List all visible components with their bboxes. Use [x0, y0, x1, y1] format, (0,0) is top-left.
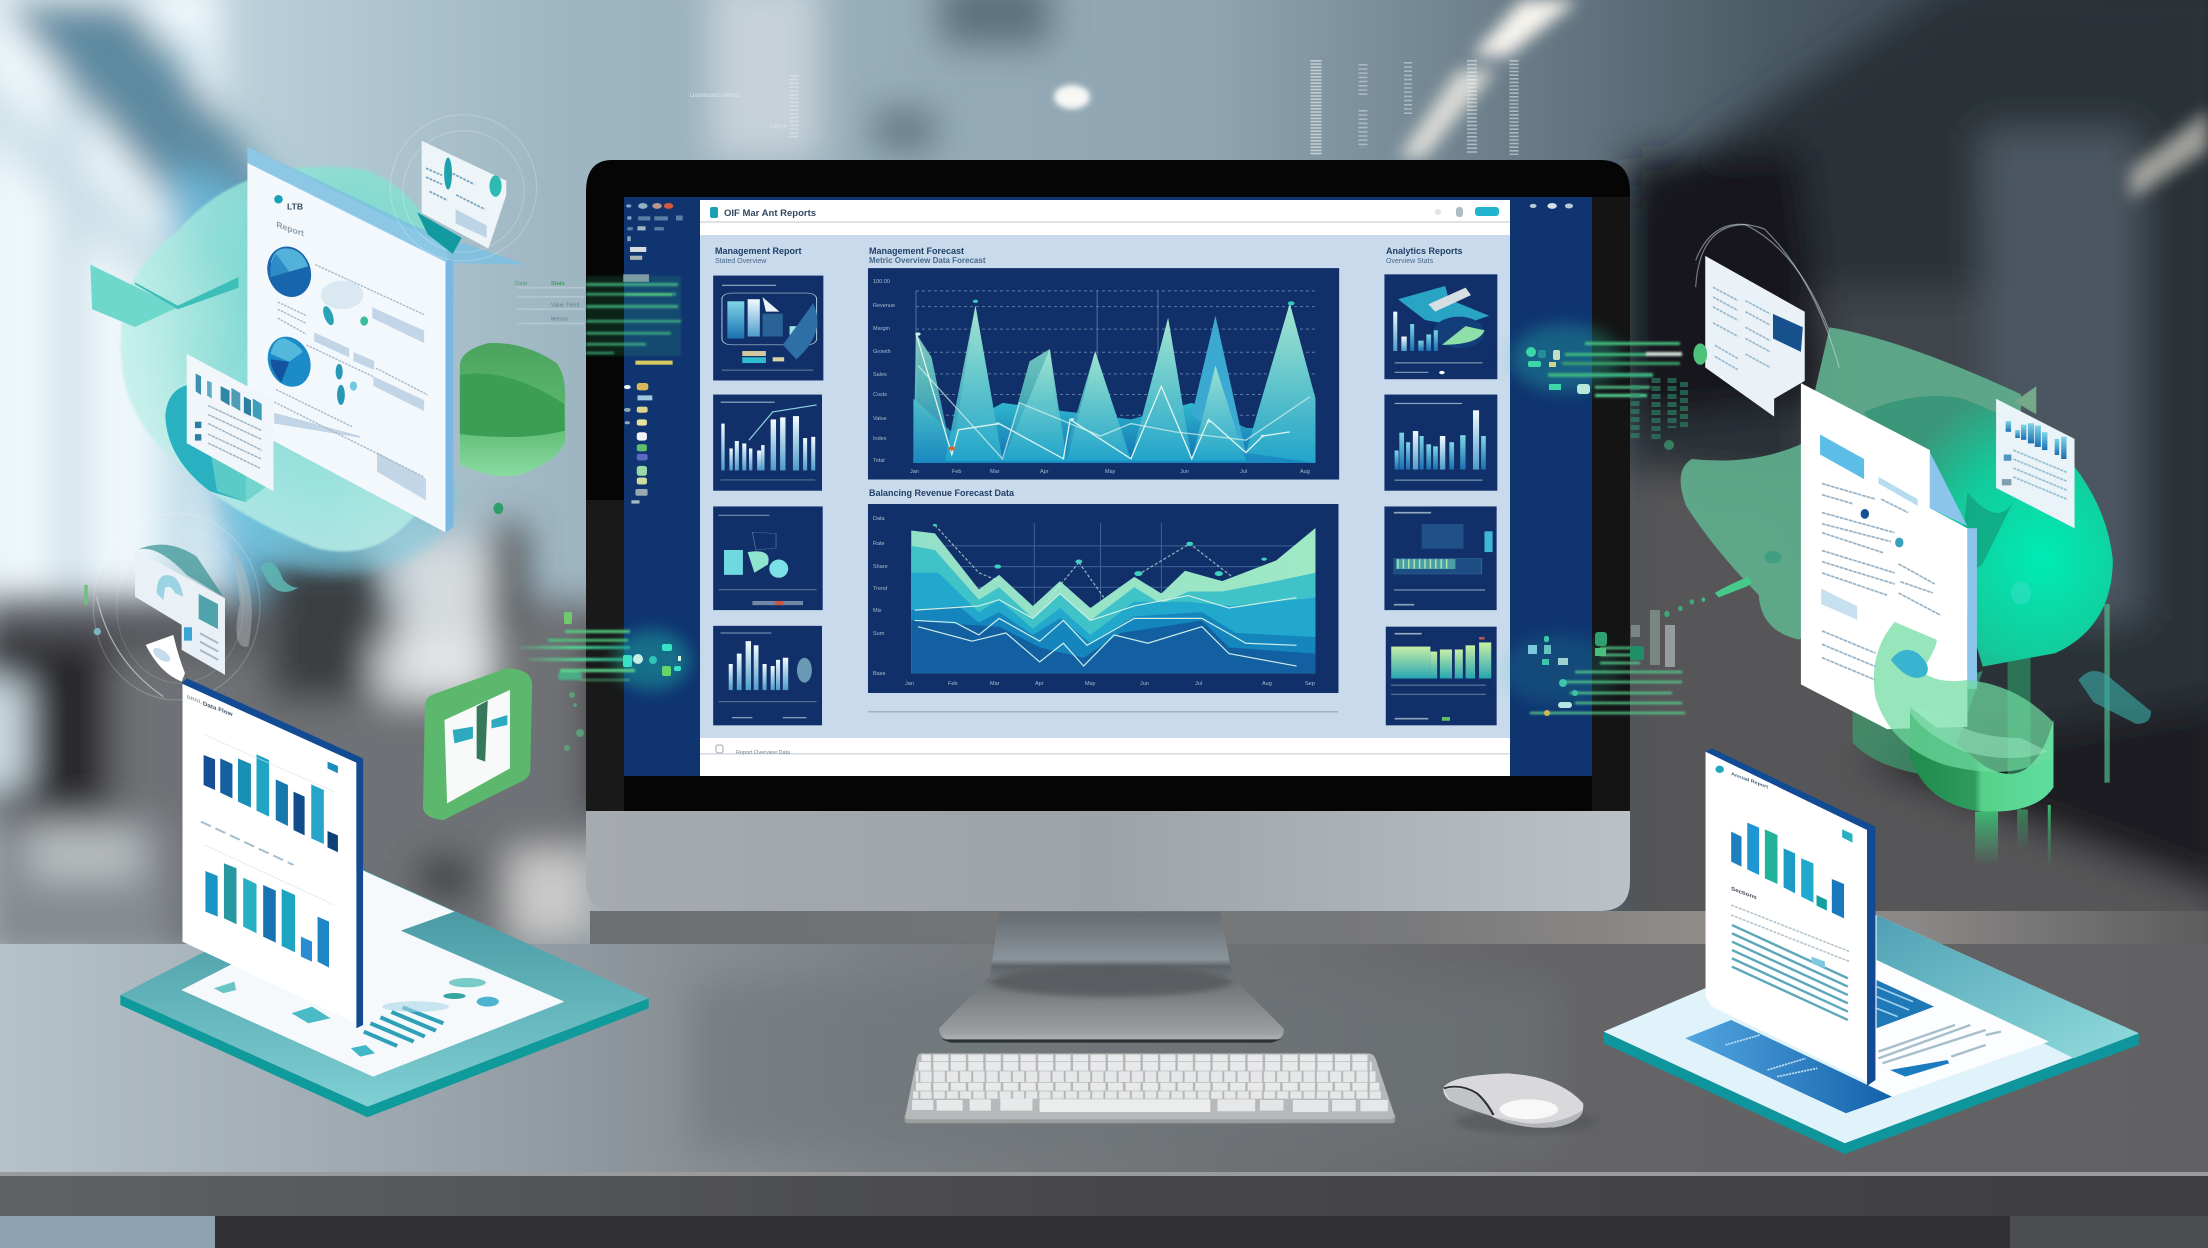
floating data text, top: Dashboard metrics [690, 93, 740, 99]
chart axis labels: Jan [910, 469, 919, 475]
monitor [586, 160, 1630, 1043]
blue header fold [247, 147, 526, 265]
green blob [1681, 327, 2151, 796]
glowing data stream, left lower [520, 612, 690, 751]
chart axis labels: Margin [873, 326, 890, 332]
app window: Overview Stats [1386, 258, 1434, 265]
chart axis labels: Growth [873, 349, 891, 355]
chart axis labels: Total [873, 458, 885, 464]
chart axis labels: Feb [948, 681, 957, 687]
chart axis labels: Apr [1040, 469, 1049, 475]
center chart 1 [868, 268, 1339, 480]
app window [700, 200, 1510, 776]
app window: Metric Overview Data Forecast [869, 256, 986, 265]
blue panels [1685, 1020, 1892, 1113]
platform white sheet [181, 868, 564, 1077]
ceiling lights [1054, 0, 2208, 200]
floating faint labels and rows: Value Trend [551, 302, 579, 308]
main page: Report [276, 219, 304, 238]
app title bar: OIF Mar Ant Reports [724, 208, 816, 219]
green ring [1874, 622, 2053, 867]
page: Sections [1731, 886, 1757, 901]
right thumbnails [1384, 274, 1497, 725]
app window: Report Overview Data [736, 750, 791, 756]
glowing data stream, right upper [1510, 324, 1684, 450]
chin [586, 805, 1630, 911]
chart axis labels: Aug [1262, 681, 1272, 687]
main white page [1801, 383, 1977, 729]
floating document with bars on teal platform, left [120, 678, 649, 1117]
screen sidebar icons [623, 203, 1573, 504]
chart axis labels: Mix [873, 608, 882, 614]
floating data text, top: 0.24 14 [770, 124, 787, 130]
floating composition: left large document [90, 115, 585, 573]
floating faint labels and rows: Metrics [551, 317, 568, 323]
chart axis labels: Jun [1140, 681, 1149, 687]
chart axis labels: Aug [1300, 469, 1310, 475]
platform [1604, 915, 2139, 1154]
glowing data stream, right lower [1500, 610, 1685, 716]
left thumbnails [713, 276, 823, 725]
app title bar [710, 207, 1499, 219]
stand [939, 912, 1284, 1043]
white sheet [1869, 960, 2049, 1097]
desk [0, 911, 2208, 1248]
mouse [1443, 1073, 1597, 1134]
navy screen [624, 197, 1592, 776]
page: Data Flow [203, 700, 233, 718]
floating faint labels and rows: Stats [551, 281, 565, 287]
pie chart [260, 240, 318, 303]
arcs with small document [390, 115, 537, 261]
chart axis labels: Share [873, 564, 888, 570]
arcs [1696, 224, 1839, 367]
main page: LTB [287, 201, 303, 211]
chart axis labels: Revenue [873, 303, 895, 309]
glowing data stream, left upper [586, 276, 681, 356]
center chart 2 [868, 504, 1338, 693]
chart axis labels: 100.00 [873, 279, 890, 285]
chart axis labels: Trend [873, 586, 887, 592]
chart axis labels: Rate [873, 541, 885, 547]
chart axis labels: Feb [952, 469, 961, 475]
floating faint labels and rows [515, 281, 585, 323]
pie chart [260, 330, 318, 393]
page [181, 678, 363, 1028]
chart axis labels: Apr [1035, 681, 1044, 687]
app window: Analytics Reports [1386, 246, 1463, 256]
blurred office background [0, 0, 2208, 960]
chart axis labels: Jun [1180, 469, 1189, 475]
teal blob [90, 167, 456, 573]
bezel [586, 160, 1630, 811]
page: BRNL [187, 695, 202, 706]
chart axis labels [873, 279, 1315, 687]
green cushion [460, 343, 565, 514]
floating data text, top [690, 60, 1514, 155]
chart axis labels: Value [873, 416, 887, 422]
green streak [1664, 577, 1751, 617]
keyboard [905, 1053, 1395, 1123]
app window: Stated Overview [715, 258, 767, 265]
small chart page [1996, 386, 2075, 528]
floating faint labels and rows: Data [515, 281, 528, 287]
floating document cluster, lower left [84, 513, 300, 700]
chart axis labels: Sum [873, 631, 885, 637]
page [1706, 748, 1875, 1086]
main page [247, 147, 453, 532]
app window: Management Report [715, 246, 802, 256]
floating composition: right green shape [1664, 224, 2151, 867]
app window: Balancing Revenue Forecast Data [869, 488, 1015, 498]
right platform document [1604, 748, 2139, 1154]
chart axis labels: Jan [905, 681, 914, 687]
chart axis labels: May [1085, 681, 1096, 687]
chart axis labels: Data [873, 516, 886, 522]
chart axis labels: Sep [1305, 681, 1315, 687]
chart axis labels: Costs [873, 392, 887, 398]
chart axis labels: Mar [990, 681, 1000, 687]
chart axis labels: Index [873, 436, 887, 442]
green plug icon [423, 668, 532, 820]
chart axis labels: Jul [1195, 681, 1202, 687]
chart axis labels: May [1105, 469, 1116, 475]
small chart document [187, 354, 273, 491]
upper small page [1693, 256, 1805, 417]
teal platform [120, 868, 649, 1117]
chart axis labels: Base [873, 671, 886, 677]
app window: Management Forecast [869, 246, 964, 256]
chart axis labels: Mar [990, 469, 1000, 475]
page: Annual Report [1731, 771, 1768, 790]
chart axis labels: Sales [873, 372, 887, 378]
chart axis labels: Jul [1240, 469, 1247, 475]
